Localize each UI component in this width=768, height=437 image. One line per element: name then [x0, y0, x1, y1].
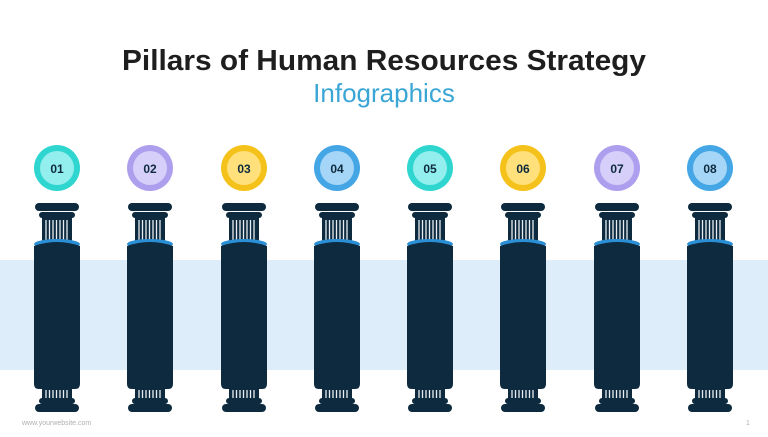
title: Pillars of Human Resources Strategy — [122, 45, 646, 77]
pillar 08: 08 — [703, 162, 717, 176]
pillar 08 — [687, 145, 733, 412]
pillar 03 — [221, 145, 267, 412]
page number: 1 — [746, 420, 750, 427]
pillar 02 — [127, 145, 173, 412]
background band — [0, 260, 768, 370]
pillar 01: 01 — [50, 162, 64, 176]
pillar 05: 05 — [423, 162, 437, 176]
pillar 01 — [34, 145, 80, 412]
pillar 04: 04 — [330, 162, 344, 176]
pillar 07 — [594, 145, 640, 412]
pillar 02: 02 — [143, 162, 157, 176]
pillar 06 — [500, 145, 546, 412]
pillar 03: 03 — [237, 162, 251, 176]
pillar 07: 07 — [610, 162, 624, 176]
subtitle: Infographics — [313, 78, 455, 108]
pillar 05 — [407, 145, 453, 412]
pillar 04 — [314, 145, 360, 412]
pillar 06: 06 — [516, 162, 530, 176]
footer website: www.yourwebsite.com — [21, 420, 91, 427]
